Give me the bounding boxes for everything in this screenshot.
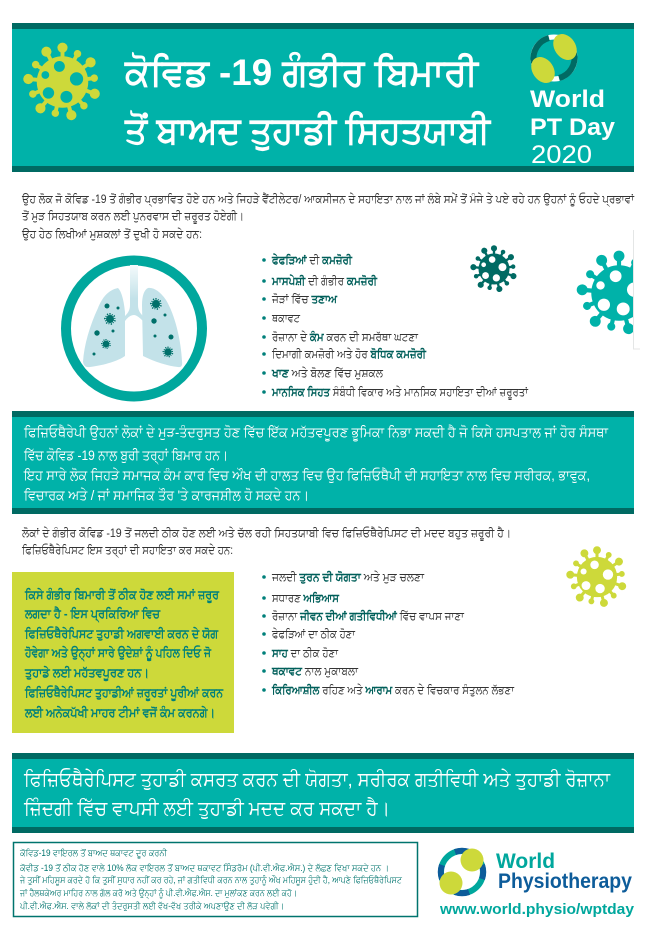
- list: problems: ਖਾਣ ਅਤੇ ਬੋਲਣ ਵਿੱਚ ਮੁਸ਼ਕਲ: [271, 366, 384, 380]
- logo: World Physiotherapy: World: [496, 850, 555, 873]
- list: how physiotherapists help: ਥਕਾਵਟ ਨਾਲ ਮੁਕਾਬਲਾ: [271, 666, 359, 678]
- list: how physiotherapists help: ਫੇਫੜਿਆਂ ਦਾ ਠੀਕ ਹੋਣਾ: [271, 627, 356, 641]
- list: how physiotherapists help: ਰੋਜ਼ਾਨਾ ਜੀਵਨ ਦੀਆਂ ਗਤੀਵਿਧੀਆਂ ਵਿੱਚ ਵਾਪਸ ਜਾਣਾ: [271, 609, 465, 623]
- teal information band: ਵਿਚਾਰਕ ਅਤੇ / ਜਾਂ ਸਮਾਜਿਕ ਤੌਰ 'ਤੇ ਕਾਰਜਸ਼ੀਲ ਹੋ ਸਕਦੇ ਹਨ।: [23, 487, 309, 503]
- logo: World Physiotherapy: www.world.physio/wptday: [439, 902, 634, 918]
- panel: yellow recovery box: ਫਿਜ਼ਿਓਥੈਰੇਪਿਸਟ ਤੁਹਾਡੀਆਂ ਜ਼ਰੂਰਤਾਂ ਪੂਰੀਆਂ ਕਰਨ: [24, 684, 224, 702]
- panel: post-viral fatigue note: [14, 842, 418, 916]
- icon: yellow virus: [23, 43, 101, 121]
- list: how physiotherapists help: ਸਧਾਰਣ ਅਭਿਆਸ: [271, 591, 340, 605]
- logo: World Physiotherapy: [439, 848, 634, 918]
- header banner: [12, 23, 634, 172]
- physiotherapist importance text: ਲੋਕਾਂ ਦੇ ਗੰਭੀਰ ਕੋਵਿਡ -19 ਤੋਂ ਜਲਦੀ ਠੀਕ ਹੋਣ ਲਈ ਅਤੇ ਚੱਲ ਰਹੀ ਸਿਹਤਯਾਬੀ ਵਿਚ ਫਿਜ਼ਿਓਥੈਰੇਪਿਸਟ ਦੀ ਮਦਦ ਬਹੁਤ ਜ਼ਰੂਰੀ ਹੈ।: [21, 526, 511, 541]
- panel: post-viral fatigue note: ਕੋਵੀਡ -19 ਤੋਂ ਠੀਕ ਹੋਣ ਵਾਲੇ 10% ਲੋਕ ਵਾਇਰਲ ਤੋਂ ਬਾਅਦ ਥਕਾਵਟ ਸਿੰਡਰੋਮ (ਪੀ.ਵੀ.ਐਫ.ਐਸ.) ਦੇ ਲੱਛਣ ਵਿਖਾ ਸਕਦੇ ਹਨ ।: [19, 862, 389, 873]
- list: problems: ਫੇਫੜਿਆਂ ਦੀ ਕਮਜ਼ੋਰੀ: [271, 252, 353, 267]
- list: problems: ਜੋੜਾਂ ਵਿੱਚ ਤਣਾਅ: [271, 292, 338, 306]
- panel: post-viral fatigue note: ਪੀ.ਵੀ.ਐਫ.ਐਸ. ਵਾਲੇ ਲੋਕਾਂ ਦੀ ਤੰਦਰੁਸਤੀ ਲਈ ਵੱਖ-ਵੱਖ ਤਰੀਕੇ ਅਪਣਾਉਣ ਦੀ ਲੋੜ ਪਵੇਗੀ।: [19, 900, 284, 911]
- logo: World Physiotherapy: Physiotherapy: [498, 870, 632, 893]
- title: ਤੋਂ ਬਾਅਦ ਤੁਹਾਡੀ ਸਿਹਤਯਾਬੀ: [124, 110, 492, 152]
- panel: yellow recovery box: ਕਿਸੇ ਗੰਭੀਰ ਬਿਮਾਰੀ ਤੋਂ ਠੀਕ ਹੋਣ ਲਈ ਸਮਾਂ ਜ਼ਰੂਰ: [24, 586, 220, 604]
- panel: post-viral fatigue note: ਕੋਵਿਡ-19 ਵਾਇਰਲ ਤੋਂ ਬਾਅਦ ਥਕਾਵਟ ਦੂਰ ਕਰਨੀ: [19, 847, 167, 859]
- logo: World PT Day 2020: World: [530, 86, 605, 113]
- intro text: ਉਹ ਹੇਠ ਲਿਖੀਆਂ ਮੁਸ਼ਕਲਾਂ ਤੋਂ ਦੁਖੀ ਹੋ ਸਕਦੇ ਹਨ:: [21, 227, 202, 241]
- panel: post-viral fatigue note: ਜਾਂ ਹੈਲਥਕੇਅਰ ਮਾਹਿਰ ਨਾਲ ਗੱਲ ਕਰੋ ਅਤੇ ਉਨ੍ਹਾਂ ਨੂੰ ਪੀ.ਵੀ.ਐਫ.ਐਸ. ਦਾ ਮੁਲਾਂਕਣ ਕਰਨ ਲਈ ਕਹੋ।: [19, 887, 297, 899]
- logo: World PT Day 2020: 2020: [531, 141, 592, 169]
- list: how physiotherapists help: ਕਿਰਿਆਸ਼ੀਲ ਰਹਿਣ ਅਤੇ ਆਰਾਮ ਕਰਨ ਦੇ ਵਿਚਕਾਰ ਸੰਤੁਲਨ ਲੱਭਣਾ: [271, 683, 515, 697]
- panel: post-viral fatigue note: ਜੇ ਤੁਸੀਂ ਮਹਿਸੂਸ ਕਰਦੇ ਹੋ ਕਿ ਤੁਸੀਂ ਸੁਧਾਰ ਨਹੀਂ ਕਰ ਰਹੇ, ਜਾਂ ਗਤੀਵਿਧੀ ਕਰਨ ਨਾਲ ਤੁਹਾਨੂੰ ਔਖ ਮਹਿਸੂਸ ਹੁੰਦੀ ਹੈ, ਆਪਣੇ ਫਿਜ਼ਿਓਥੈਰੇਪਿਸਟ: [19, 874, 402, 886]
- teal information band: ਇਹ ਸਾਰੇ ਲੋਕ ਜਿਹੜੇ ਸਮਾਜਕ ਕੰਮ ਕਾਰ ਵਿਚ ਔਖ ਦੀ ਹਾਲਤ ਵਿਚ ਉਹ ਫਿਜ਼ਿਓਥੈਪੀ ਦੀ ਸਹਾਇਤਾ ਨਾਲ ਵਿਚ ਸਰੀਰਕ, ਭਾਵੁਕ,: [23, 467, 590, 483]
- icon: lungs in teal ring: [66, 260, 202, 396]
- panel: yellow recovery box: ਫਿਜ਼ਿਓਥੈਰੇਪਿਸਟ ਤੁਹਾਡੀ ਅਗਵਾਈ ਕਰਨ ਦੇ ਯੋਗ: [24, 625, 219, 642]
- list: problems: ਥਕਾਵਟ: [271, 313, 301, 325]
- title: ਕੋਵਿਡ -19 ਗੰਭੀਰ ਬਿਮਾਰੀ: [124, 51, 480, 93]
- list: problems: ਰੋਜ਼ਾਨਾ ਦੇ ਕੰਮ ਕਰਨ ਦੀ ਸਮਰੱਥਾ ਘਟਣਾ: [271, 329, 419, 344]
- list: how physiotherapists help: [262, 569, 515, 697]
- panel: yellow recovery box: ਲਈ ਅਨੇਕਪੱਖੀ ਮਾਹਰ ਟੀਮਾਂ ਵਜੋਂ ਕੰਮ ਕਰਨਗੇ।: [24, 704, 215, 720]
- icon: dark virus: [470, 245, 517, 293]
- logo: World PT Day 2020: [526, 30, 616, 169]
- panel: yellow recovery box: ਤੁਹਾਡੇ ਲਈ ਮਹੱਤਵਪੂਰਣ ਹਨ।: [24, 665, 149, 682]
- panel: yellow recovery box: ਹੋਵੇਗਾ ਅਤੇ ਉਨ੍ਹਾਂ ਸਾਰੇ ਉਦੇਸ਼ਾਂ ਨੂੰ ਪਹਿਲ ਦਿਓ ਜੋ: [24, 644, 212, 662]
- teal information band: ਵਿੱਚ ਕੋਵਿਡ -19 ਨਾਲ ਬੁਰੀ ਤਰ੍ਹਾਂ ਬਿਮਾਰ ਹਨ।: [23, 447, 228, 465]
- bottom teal banner: ਜ਼ਿੰਦਗੀ ਵਿੱਚ ਵਾਪਸੀ ਲਈ ਤੁਹਾਡੀ ਮਦਦ ਕਰ ਸਕਦਾ ਹੈ।: [23, 796, 390, 820]
- bottom teal banner: [12, 753, 634, 833]
- title: [124, 51, 492, 152]
- icon: small yellow virus: [566, 546, 627, 608]
- logo: World PT Day 2020: PT Day: [530, 114, 616, 141]
- physiotherapist importance text: [21, 526, 511, 558]
- intro text: ਤੋਂ ਮੁੜ ਸਿਹਤਯਾਬ ਕਰਨ ਲਈ ਪੁਨਰਵਾਸ ਦੀ ਜ਼ਰੂਰਤ ਹੋਏਗੀ।: [21, 209, 244, 224]
- list: problems: ਦਿਮਾਗੀ ਕਮਜ਼ੋਰੀ ਅਤੇ ਹੋਰ ਬੋਧਿਕ ਕਮਜ਼ੋਰੀ: [271, 346, 427, 361]
- physiotherapist importance text: ਫਿਜ਼ਿਓਥੈਰੇਪਿਸਟ ਇਸ ਤਰ੍ਹਾਂ ਦੀ ਸਹਾਇਤਾ ਕਰ ਸਕਦੇ ਹਨ:: [21, 543, 233, 558]
- icon: teal virus clipped at the edge: [576, 250, 633, 334]
- panel: yellow recovery box: [12, 572, 234, 733]
- list: how physiotherapists help: ਸਾਹ ਦਾ ਠੀਕ ਹੋਣਾ: [271, 646, 339, 660]
- list: problems: [262, 252, 529, 400]
- list: problems: ਮਾਸਪੇਸ਼ੀ ਦੀ ਗੰਭੀਰ ਕਮਜ਼ੋਰੀ: [271, 273, 378, 288]
- list: how physiotherapists help: ਜਲਦੀ ਤੁਰਨ ਦੀ ਯੋਗਤਾ ਅਤੇ ਮੁੜ ਚਲਣਾ: [271, 569, 425, 584]
- intro text: [21, 192, 635, 241]
- list: problems: ਮਾਨਸਿਕ ਸਿਹਤ ਸੰਬੰਧੀ ਵਿਕਾਰ ਅਤੇ ਮਾਨਸਿਕ ਸਹਾਇਤਾ ਦੀਆਂ ਜ਼ਰੂਰਤਾਂ: [271, 385, 529, 400]
- teal information band: [12, 411, 634, 514]
- panel: yellow recovery box: ਲਗਦਾ ਹੈ - ਇਸ ਪ੍ਰਕਿਰਿਆ ਵਿਚ: [24, 605, 161, 623]
